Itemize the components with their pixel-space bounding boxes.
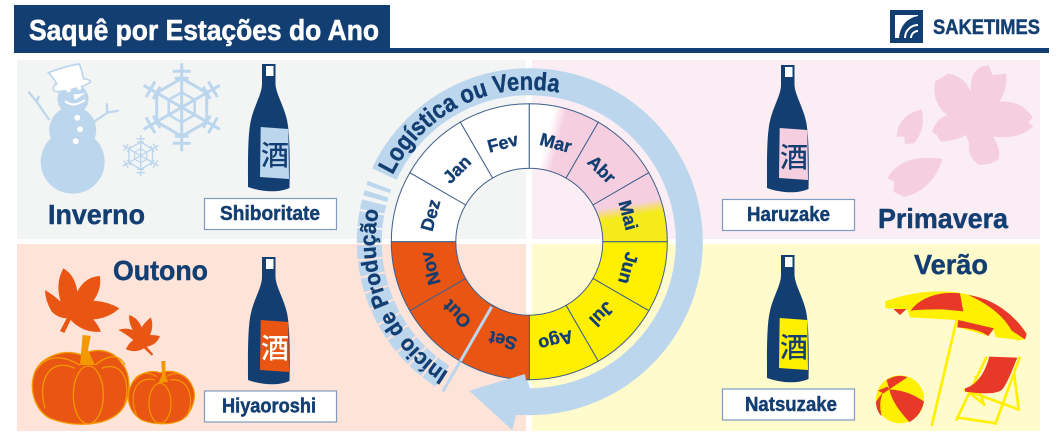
icon: autumn bottle bbox=[248, 257, 290, 384]
icon: winter bottle bbox=[248, 64, 290, 191]
panel: winter bbox=[17, 60, 526, 239]
production start line over ring bbox=[460, 307, 492, 361]
heading: Inverno: Inverno bbox=[48, 199, 145, 230]
icon: small maple leaf bbox=[118, 315, 160, 356]
icon: deck chair bbox=[956, 357, 1020, 425]
month: Set bbox=[460, 305, 529, 380]
month ring bbox=[391, 104, 667, 380]
month: Out bbox=[410, 278, 493, 361]
month: Mai bbox=[593, 173, 667, 242]
month: Ago bbox=[529, 305, 598, 380]
icon: large snowflake bbox=[139, 63, 224, 151]
arc text: Logística ou Venda: Logística ou Venda bbox=[378, 72, 560, 174]
heading: Outono: Outono bbox=[113, 255, 208, 286]
month labels: Jan bbox=[439, 151, 475, 187]
label: Hiyaoroshi: Hiyaoroshi bbox=[222, 396, 316, 418]
logo: SAKETIMES bbox=[890, 10, 1040, 43]
label: Natsuzake: Natsuzake bbox=[745, 394, 837, 416]
month labels: Mai bbox=[614, 198, 642, 232]
label: Hiyaoroshi bbox=[204, 391, 336, 422]
label: Natsuzake bbox=[722, 389, 854, 420]
title: Saquê por Estações do Ano bbox=[29, 15, 379, 47]
panel: autumn bbox=[17, 244, 526, 431]
label: Haruzake: Haruzake bbox=[747, 204, 830, 226]
icon: small snowflake bbox=[121, 135, 161, 176]
month labels: Set bbox=[487, 327, 519, 354]
month labels: Jul bbox=[585, 298, 618, 330]
icon: small pumpkin bbox=[128, 361, 194, 424]
month: Jul bbox=[566, 278, 649, 361]
month: Abr bbox=[566, 122, 649, 205]
month labels: Nov bbox=[417, 249, 445, 287]
label: Haruzake bbox=[722, 200, 854, 230]
month labels: Out bbox=[439, 296, 475, 332]
month: Jun bbox=[593, 242, 667, 311]
month: Dez bbox=[391, 173, 466, 242]
icon: beach ball bbox=[876, 375, 924, 423]
label: Shiboritate: Shiboritate bbox=[220, 203, 320, 225]
month labels: Ago bbox=[536, 326, 575, 355]
title bar bbox=[14, 5, 1049, 53]
month labels bbox=[417, 129, 642, 355]
month labels: Abr bbox=[584, 151, 620, 187]
production start line bbox=[443, 307, 492, 392]
month labels: Fev bbox=[485, 129, 520, 157]
icon: snowman bbox=[28, 64, 119, 194]
label: Shiboritate bbox=[204, 198, 336, 230]
arrow: sales band bbox=[384, 82, 689, 430]
panel: summer bbox=[532, 244, 1040, 431]
month: Nov bbox=[391, 242, 466, 311]
month: Jan bbox=[410, 122, 493, 205]
heading: Verão: Verão bbox=[914, 249, 988, 280]
icon: summer bottle: 酒 bbox=[780, 326, 808, 366]
icon: spring bottle bbox=[767, 65, 809, 192]
month labels: Dez bbox=[417, 197, 444, 233]
icon: cherry blossom bbox=[887, 65, 1033, 197]
icon: winter bottle: 酒 bbox=[261, 134, 289, 174]
panel: spring bbox=[532, 60, 1040, 239]
calendar wheel with arrow bbox=[356, 68, 703, 430]
icon: autumn bottle: 酒 bbox=[261, 327, 289, 367]
month: Mar bbox=[529, 104, 598, 178]
icon: large maple leaf bbox=[45, 268, 119, 333]
heading: Primavera: Primavera bbox=[878, 203, 1008, 234]
icon: autumn leaves and pumpkins bbox=[32, 268, 194, 424]
icon: beach umbrella bbox=[885, 291, 1027, 426]
arc text: Início de Produção: Início de Produção bbox=[360, 210, 448, 385]
month labels: Mar bbox=[538, 129, 574, 157]
icon: beach ball and deck chair bbox=[876, 357, 1020, 425]
start-of-production stripes bbox=[369, 184, 444, 377]
icon: summer bottle bbox=[767, 255, 809, 382]
arrow head overlap bbox=[469, 374, 527, 430]
month: Fev bbox=[460, 104, 529, 178]
logo wordmark: SAKETIMES bbox=[933, 16, 1040, 39]
month labels: Jun bbox=[614, 250, 642, 286]
icon: spring bottle: 酒 bbox=[780, 136, 808, 176]
icon: large pumpkin bbox=[32, 335, 129, 424]
